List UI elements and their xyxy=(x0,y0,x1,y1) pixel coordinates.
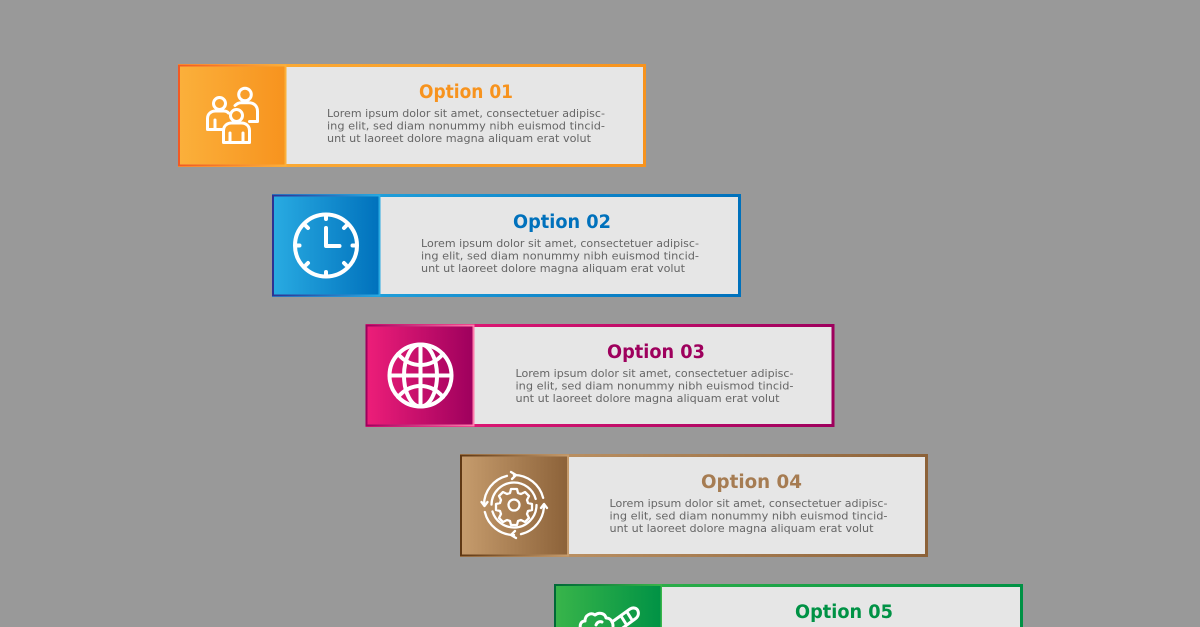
text block: option 01 xyxy=(327,107,605,145)
panel: option 04 xyxy=(461,456,926,556)
text block: option 01: Lorem ipsum dolor sit amet, consectetuer adipisc- xyxy=(327,107,605,120)
icon: cloud and pencil xyxy=(578,606,640,627)
icon box: option 03 xyxy=(366,326,474,426)
heading: option 05: Option 05 xyxy=(795,602,893,623)
heading: option 03: Option 03 xyxy=(607,342,705,363)
text block: option 04: unt ut laoreet dolore magna aliquam erat volut xyxy=(610,522,874,535)
icon: clock xyxy=(295,214,357,276)
icon: gear with cycle arrows xyxy=(482,472,547,538)
panel: option 02 xyxy=(273,196,740,296)
panel: option 01 xyxy=(179,66,644,166)
text block: option 02: ing elit, sed diam nonummy nibh euismod tincid- xyxy=(421,250,699,262)
panel: option 05 xyxy=(554,584,1023,627)
text block: option 04: Lorem ipsum dolor sit amet, consectetuer adipisc- xyxy=(610,497,888,510)
icon box: option 01 xyxy=(179,66,286,166)
icon box: option 02 xyxy=(273,196,380,296)
text block: option 03 xyxy=(516,367,794,405)
text block: option 02: unt ut laoreet dolore magna aliquam erat volut xyxy=(421,262,685,275)
heading: option 02: Option 02 xyxy=(513,212,611,233)
text block: option 02: Lorem ipsum dolor sit amet, consectetuer adipisc- xyxy=(421,237,699,250)
text block: option 03: Lorem ipsum dolor sit amet, consectetuer adipisc- xyxy=(516,367,794,380)
text block: option 01: unt ut laoreet dolore magna aliquam erat volut xyxy=(327,132,591,145)
text block: option 03: unt ut laoreet dolore magna aliquam erat volut xyxy=(516,392,780,405)
panel: option 03 xyxy=(366,326,833,426)
heading: option 04: Option 04 xyxy=(701,472,802,493)
icon: people xyxy=(208,88,258,142)
text block: option 01: ing elit, sed diam nonummy nibh euismod tincid- xyxy=(327,120,605,132)
icon: globe xyxy=(390,344,452,406)
text block: option 04: ing elit, sed diam nonummy nibh euismod tincid- xyxy=(610,510,888,522)
text block: option 02 xyxy=(421,237,699,275)
icon box: option 04 xyxy=(461,456,568,556)
text block: option 04 xyxy=(610,497,888,535)
heading: option 01: Option 01 xyxy=(419,82,513,103)
text block: option 03: ing elit, sed diam nonummy nibh euismod tincid- xyxy=(516,380,794,392)
icon box: option 05 xyxy=(554,584,662,627)
